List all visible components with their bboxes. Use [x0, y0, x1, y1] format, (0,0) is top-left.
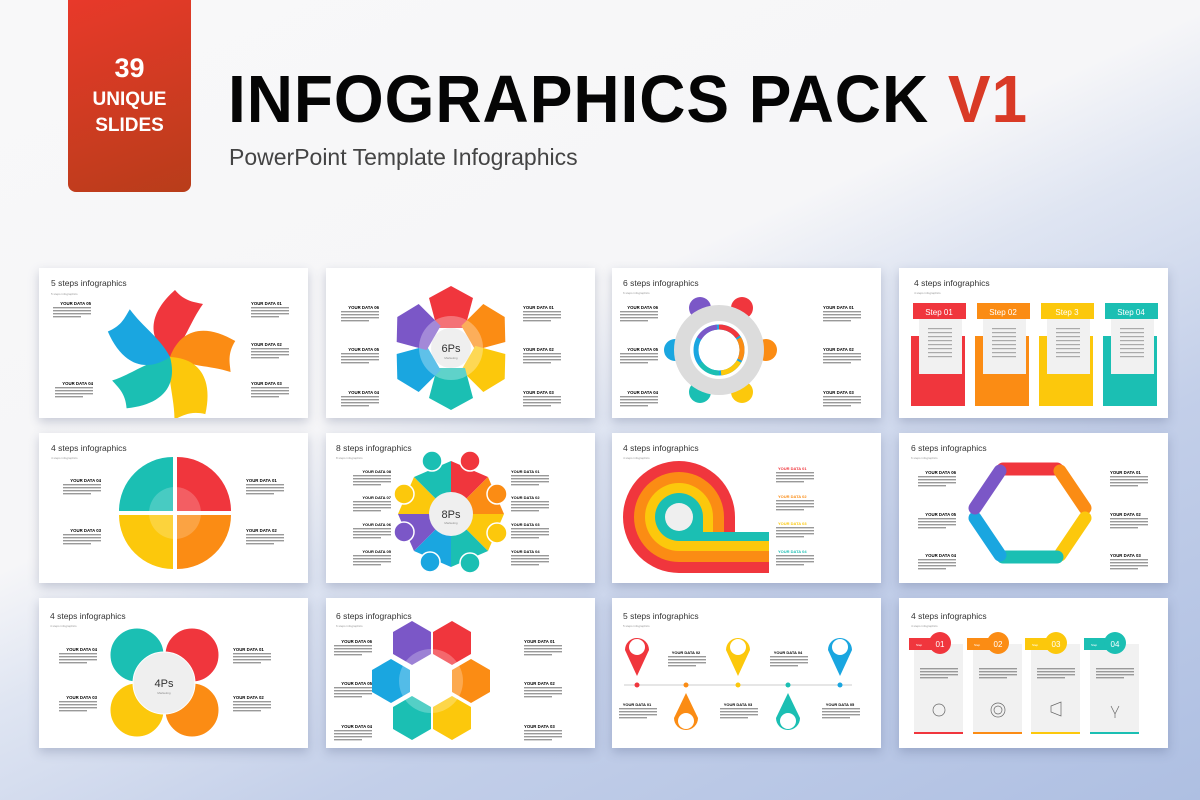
slide 11: timeline pins: YOUR DATA 03 — [724, 702, 753, 707]
slide 12: 4 step cards: Step — [974, 643, 981, 647]
slide 8: hexagon of bars: YOUR DATA 01 — [1110, 470, 1141, 475]
slide 10: 6 hexagons: YOUR DATA 02 — [524, 681, 555, 686]
slide 4: 4 step columns: Step 02 — [989, 308, 1017, 317]
slide 6: 8Ps marketing: 8Ps — [442, 509, 461, 521]
slide 6: 8Ps marketing: YOUR DATA 05 — [362, 549, 392, 554]
badge: 39 unique slides — [68, 0, 191, 192]
slide 4: 4 step columns: 4 steps infographics — [914, 278, 990, 288]
slide 1: 5 steps star: YOUR DATA 04 — [62, 381, 94, 386]
slide 1: 5 steps star: YOUR DATA 02 — [251, 342, 282, 347]
slide 2: 6Ps marketing: Marketing — [444, 356, 458, 360]
slide 11: timeline pins: 5 steps infographics — [623, 611, 699, 621]
slide 10: 6 hexagons: 6 steps infographics — [336, 624, 363, 628]
slide 3: 6 steps donut: YOUR DATA 01 — [823, 305, 854, 310]
slide 6: 8Ps marketing: YOUR DATA 08 — [362, 469, 392, 474]
slide 1: 5 steps star: YOUR DATA 01 — [251, 301, 282, 306]
slide 12: 4 step cards: 02 — [994, 640, 1003, 649]
slide 10: 6 hexagons: YOUR DATA 05 — [341, 681, 373, 686]
slide 11: timeline pins: 5 steps infographics — [623, 624, 650, 628]
slide 11: timeline pins: YOUR DATA 02 — [672, 650, 701, 655]
slide 9: 4Ps circles: 4Ps — [155, 678, 174, 690]
slide 8: hexagon of bars — [899, 433, 1168, 583]
slide 2: 6Ps marketing: YOUR DATA 05 — [348, 347, 380, 352]
slide 10: 6 hexagons: YOUR DATA 01 — [524, 639, 555, 644]
slide 3: 6 steps donut: YOUR DATA 05 — [627, 347, 659, 352]
slide 4: 4 step columns: Step 04 — [1117, 308, 1145, 317]
slide 12: 4 step cards: 4 steps infographics — [911, 611, 987, 621]
slide 7: rainbow spiral: 4 steps infographics — [623, 443, 699, 453]
slide 6: 8Ps marketing: YOUR DATA 06 — [362, 522, 392, 527]
slide 11: timeline pins: YOUR DATA 01 — [623, 702, 652, 707]
slide 2: 6Ps marketing: YOUR DATA 01 — [523, 305, 554, 310]
badge: 39 unique slides: 39 — [114, 53, 145, 83]
slide 7: rainbow spiral: YOUR DATA 04 — [778, 549, 807, 554]
slide 10: 6 hexagons: YOUR DATA 06 — [341, 639, 373, 644]
slide 1: 5 steps star: YOUR DATA 05 — [60, 301, 92, 306]
slide 10: 6 hexagons: YOUR DATA 04 — [341, 724, 373, 729]
slide 12: 4 step cards: Step — [1091, 643, 1098, 647]
slide 6: 8Ps marketing: 8 steps infographics — [336, 443, 412, 453]
slide 6: 8Ps marketing: YOUR DATA 01 — [511, 469, 540, 474]
slide 5: 4 quadrant circle: YOUR DATA 03 — [70, 528, 102, 533]
slide 6: 8Ps marketing: YOUR DATA 07 — [362, 495, 392, 500]
slide 6: 8Ps marketing: YOUR DATA 02 — [511, 495, 540, 500]
slide 3: 6 steps donut: 6 steps infographics — [623, 278, 699, 288]
slide 12: 4 step cards — [899, 598, 1168, 748]
slide 9: 4Ps circles: YOUR DATA 02 — [233, 695, 264, 700]
slide 8: hexagon of bars: 6 steps infographics — [911, 443, 987, 453]
slide 7: rainbow spiral: YOUR DATA 03 — [778, 521, 807, 526]
slide 3: 6 steps donut: 6 steps infographics — [623, 291, 650, 295]
slide 1: 5 steps star: 5 steps infographics — [51, 278, 127, 288]
slide 2: 6Ps marketing: YOUR DATA 06 — [348, 305, 380, 310]
slide 1: 5 steps star: 5 steps infographics — [51, 292, 78, 296]
slide 10: 6 hexagons — [326, 598, 595, 748]
slide 9: 4Ps circles: 4 steps infographics — [50, 624, 77, 628]
slide 3: 6 steps donut: YOUR DATA 06 — [627, 305, 659, 310]
slide 7: rainbow spiral — [612, 433, 881, 583]
slide 5: 4 quadrant circle: 4 steps infographics — [51, 443, 127, 453]
slide 4: 4 step columns — [899, 268, 1168, 418]
slide 2: 6Ps marketing — [326, 268, 595, 418]
slide 3: 6 steps donut: YOUR DATA 02 — [823, 347, 854, 352]
slide 9: 4Ps circles: Marketing — [157, 691, 171, 695]
slide 3: 6 steps donut: YOUR DATA 04 — [627, 390, 659, 395]
slide 12: 4 step cards: 01 — [936, 640, 945, 649]
slide 6: 8Ps marketing: 8 steps infographics — [336, 456, 363, 460]
slide 5: 4 quadrant circle — [39, 433, 308, 583]
slide 4: 4 step columns: Step 3 — [1055, 308, 1079, 317]
slide 11: timeline pins: YOUR DATA 05 — [826, 702, 855, 707]
slide 11: timeline pins: YOUR DATA 04 — [774, 650, 803, 655]
badge: 39 unique slides: SLIDES — [95, 115, 164, 136]
slide 5: 4 quadrant circle: YOUR DATA 04 — [70, 478, 102, 483]
slide 2: 6Ps marketing: 6Ps — [442, 343, 461, 355]
slide 12: 4 step cards: 03 — [1052, 640, 1061, 649]
slide 8: hexagon of bars: YOUR DATA 03 — [1110, 553, 1141, 558]
slide 12: 4 step cards: Step — [916, 643, 923, 647]
badge: 39 unique slides: UNIQUE — [93, 89, 166, 110]
slide 2: 6Ps marketing: YOUR DATA 03 — [523, 390, 554, 395]
slide 7: rainbow spiral: 4 steps infographics — [623, 456, 650, 460]
slide 1: 5 steps star: YOUR DATA 03 — [251, 381, 282, 386]
slide 2: 6Ps marketing: YOUR DATA 02 — [523, 347, 554, 352]
slide 6: 8Ps marketing: YOUR DATA 04 — [511, 549, 540, 554]
slide 3: 6 steps donut: YOUR DATA 03 — [823, 390, 854, 395]
slide 5: 4 quadrant circle: 4 steps infographics — [51, 456, 78, 460]
slide 8: hexagon of bars: YOUR DATA 06 — [925, 470, 957, 475]
slide 12: 4 step cards: 04 — [1111, 640, 1120, 649]
slide 6: 8Ps marketing: Marketing — [444, 521, 458, 525]
slide 12: 4 step cards: 4 steps infographics — [911, 624, 938, 628]
slide 4: 4 step columns: Step 01 — [925, 308, 953, 317]
slide 8: hexagon of bars: YOUR DATA 02 — [1110, 512, 1141, 517]
slide 5: 4 quadrant circle: YOUR DATA 02 — [246, 528, 277, 533]
slide 10: 6 hexagons: 6 steps infographics — [336, 611, 412, 621]
slide 8: hexagon of bars: 6 steps infographics — [911, 456, 938, 460]
slide 9: 4Ps circles: 4 steps infographics — [50, 611, 126, 621]
slide 10: 6 hexagons: YOUR DATA 03 — [524, 724, 555, 729]
slide 2: 6Ps marketing: YOUR DATA 04 — [348, 390, 380, 395]
slide 9: 4Ps circles: YOUR DATA 01 — [233, 647, 264, 652]
slide 9: 4Ps circles: YOUR DATA 04 — [66, 647, 98, 652]
slide 3: 6 steps donut — [612, 268, 881, 418]
slide 8: hexagon of bars: YOUR DATA 04 — [925, 553, 957, 558]
slide 7: rainbow spiral: YOUR DATA 01 — [778, 466, 807, 471]
slide 11: timeline pins — [612, 598, 881, 748]
slide 7: rainbow spiral: YOUR DATA 02 — [778, 494, 807, 499]
slide 6: 8Ps marketing: YOUR DATA 03 — [511, 522, 540, 527]
title: INFOGRAPHICS PACK V1 — [228, 62, 1028, 137]
slide 9: 4Ps circles: YOUR DATA 03 — [66, 695, 98, 700]
subtitle: PowerPoint Template Infographics — [229, 144, 578, 170]
slide 1: 5 steps star — [39, 268, 308, 418]
slide 12: 4 step cards: Step — [1032, 643, 1039, 647]
slide 8: hexagon of bars: YOUR DATA 05 — [925, 512, 957, 517]
slide 6: 8Ps marketing — [326, 433, 595, 583]
slide 5: 4 quadrant circle: YOUR DATA 01 — [246, 478, 277, 483]
slide 4: 4 step columns: 4 steps infographics — [914, 291, 941, 295]
slide 9: 4Ps circles — [39, 598, 308, 748]
